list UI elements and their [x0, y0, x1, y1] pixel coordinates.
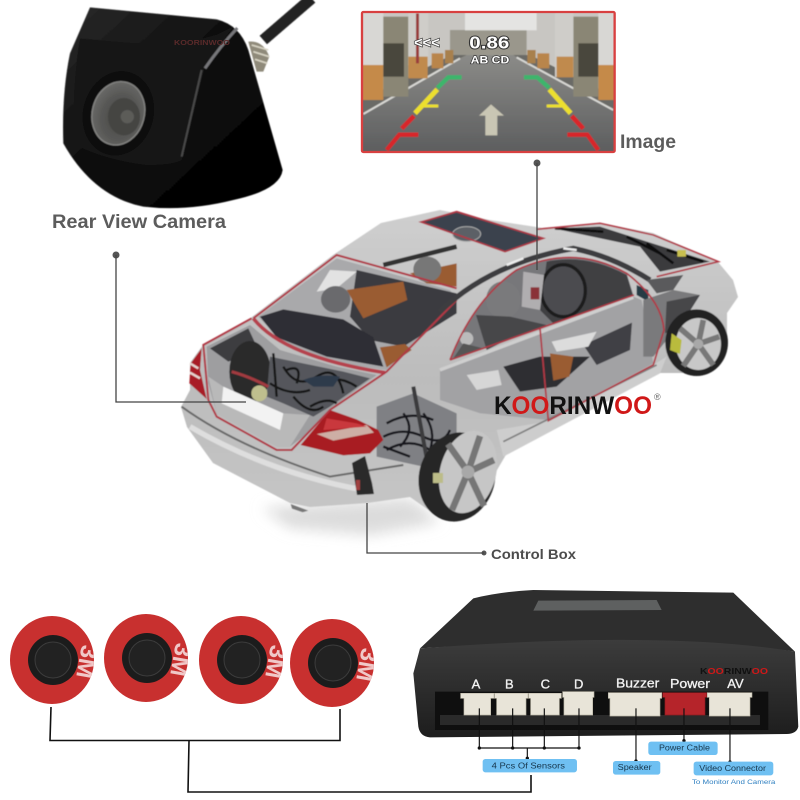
port labels: A [472, 676, 481, 691]
label: image: Image [620, 132, 676, 153]
port labels: D [574, 676, 583, 691]
callout: 4 pcs of sensors: 4 Pcs Of Sensors [492, 761, 565, 771]
port labels: B [505, 676, 514, 691]
sensor 3: 3M [259, 643, 292, 680]
port labels [472, 675, 744, 691]
red power connector [663, 693, 707, 715]
rear wheel [409, 424, 506, 530]
cabin [450, 257, 633, 360]
sunroof [421, 212, 543, 252]
door lower [440, 297, 653, 420]
sensor 2: 3M [164, 641, 197, 678]
callout: power cable: Power Cable [659, 743, 710, 753]
callout: power cable [648, 742, 718, 755]
port labels: C [541, 676, 550, 691]
left tail light [189, 348, 207, 399]
icon: rear view camera [63, 0, 312, 208]
right tail light [301, 410, 383, 455]
red seals on front [421, 212, 718, 421]
ground shadow [262, 498, 440, 535]
sensor 4: 3M [350, 646, 383, 683]
callout: video connector [694, 762, 773, 775]
sill and lower body [497, 357, 667, 457]
front wheel [665, 309, 728, 376]
icon: direction arrow [479, 104, 504, 135]
watermark on box: KOORINWOO [700, 666, 768, 676]
roof rail [440, 248, 650, 312]
boot interior [207, 325, 377, 447]
port labels: Power [670, 676, 711, 691]
connectors [461, 692, 752, 716]
box top face [420, 590, 795, 652]
watermark: brand name: KOORINWOO [494, 392, 652, 420]
parking guide lines [387, 77, 598, 150]
connector recess [435, 692, 768, 730]
sensor 1 [10, 616, 103, 704]
sensor 4 [290, 619, 383, 707]
watermark on camera: KOORINWOO [174, 40, 231, 47]
machinery behind right tail light [377, 393, 457, 467]
callout: video connector: Video Connector [699, 763, 766, 773]
rear glass and interior [258, 258, 457, 370]
label: rear view camera: Rear View Camera [52, 212, 226, 233]
port labels: AV [727, 676, 744, 691]
port labels: Buzzer [616, 675, 660, 690]
mounted control box [352, 456, 374, 495]
callout: speaker: Speaker [618, 762, 652, 772]
bumper lines [182, 407, 403, 477]
display window [533, 600, 662, 611]
callout: 4 pcs of sensors [483, 759, 577, 772]
panel: backup camera screen image: <<< [414, 35, 440, 51]
panel: backup camera screen image: 0.86 [469, 33, 509, 53]
panel: control box with connectors [413, 590, 798, 786]
label: control box: Control Box [491, 546, 576, 562]
connector wires [479, 708, 730, 763]
leader: camera to car [112, 252, 246, 402]
sensor 2 [104, 614, 197, 702]
leader: control box [367, 503, 486, 556]
car body [181, 210, 738, 518]
leader: image to car [534, 160, 540, 270]
box front face [413, 640, 798, 737]
car front half [421, 212, 728, 457]
callout: speaker [613, 761, 660, 775]
panel: backup camera screen image: AB CD [471, 55, 509, 67]
front mechanics [637, 285, 648, 302]
registered mark: ® [654, 392, 661, 402]
panel: backup camera screen image [362, 12, 615, 152]
car rear half [182, 247, 457, 512]
caption: to monitor and camera: To Monitor And Camera [692, 779, 776, 786]
sensor 1: 3M [70, 643, 103, 680]
wiring: sensors to control box [50, 707, 531, 792]
sensor 3 [199, 616, 292, 704]
red seals on rear [203, 255, 457, 450]
illustration: cutaway car [181, 210, 738, 535]
engine bay [553, 227, 710, 272]
